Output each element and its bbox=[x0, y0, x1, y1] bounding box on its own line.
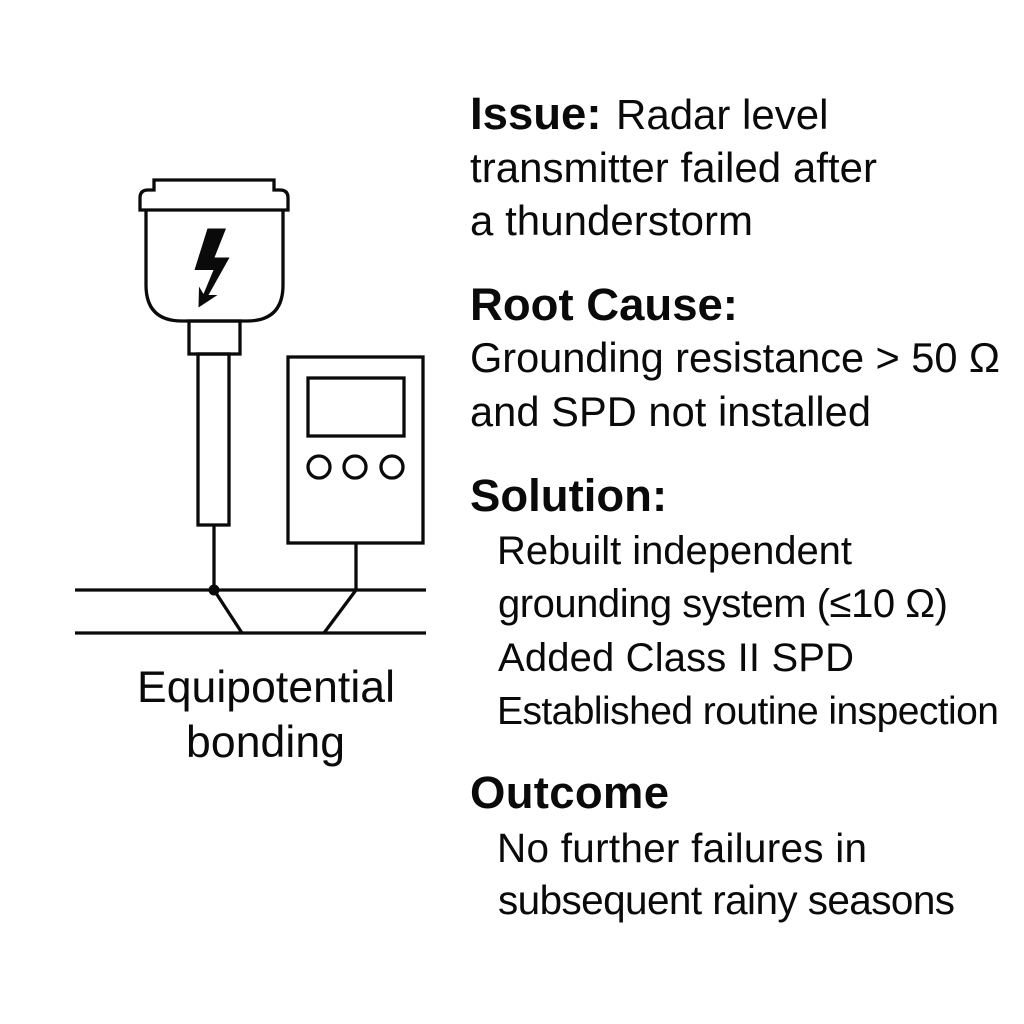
diagram caption: bonding bbox=[186, 718, 345, 767]
text block: solution: grounding system (≤10 Ω) bbox=[498, 582, 948, 626]
text block: outcome: No further failures in bbox=[497, 825, 867, 871]
text block: issue: Radar level bbox=[616, 91, 828, 138]
text block: solution: Established routine inspection bbox=[497, 690, 999, 733]
text block: root cause: and SPD not installed bbox=[470, 388, 871, 435]
text block: issue: transmitter failed after bbox=[470, 144, 877, 191]
icon: controller box bbox=[288, 357, 423, 543]
text block: outcome: subsequent rainy seasons bbox=[498, 877, 955, 923]
diagram caption: Equipotential bbox=[137, 663, 395, 712]
text block: root cause: Grounding resistance > 50 Ω bbox=[470, 334, 1000, 381]
text block: solution: Added Class II SPD bbox=[498, 636, 854, 680]
text block: solution: Rebuilt independent bbox=[497, 529, 852, 573]
text block: issue: Issue: bbox=[470, 88, 602, 139]
text block: issue: a thunderstorm bbox=[470, 197, 753, 244]
equipotential bonding lines bbox=[75, 525, 426, 633]
text block: issue bbox=[470, 88, 877, 244]
icon: lightning bolt bbox=[194, 228, 230, 308]
text block: outcome bbox=[470, 767, 955, 923]
text block: solution: Solution: bbox=[470, 470, 667, 521]
text block: root cause: Root Cause: bbox=[470, 279, 738, 330]
text block: root cause bbox=[470, 279, 1000, 435]
text block: outcome: Outcome bbox=[470, 767, 669, 818]
icon: radar level transmitter bbox=[140, 180, 288, 525]
diagram caption bbox=[137, 663, 395, 767]
text block: solution bbox=[470, 470, 999, 733]
